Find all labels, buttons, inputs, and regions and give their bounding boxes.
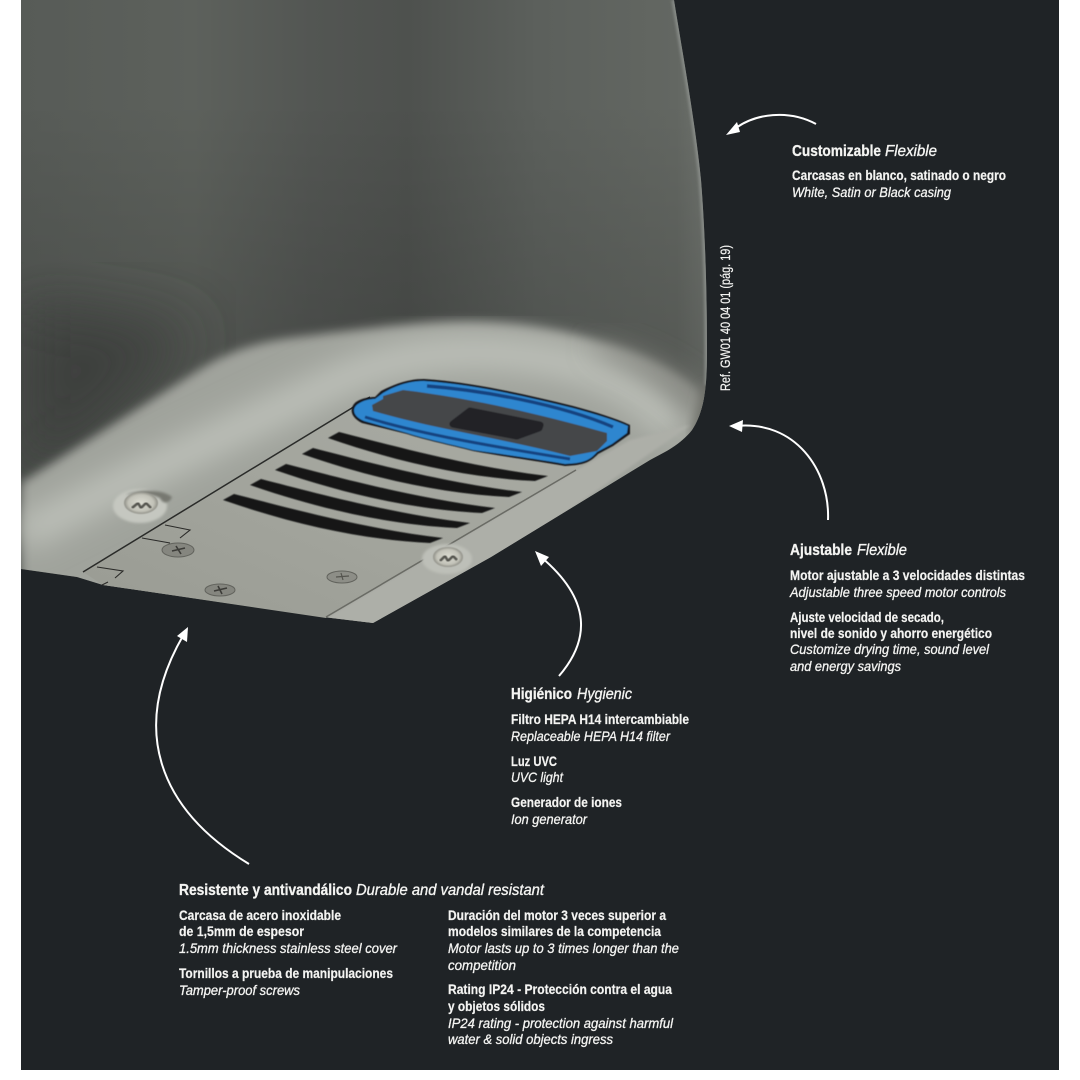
text block: ajustable [789, 542, 1025, 674]
text block: ajustable: Flexible [857, 542, 907, 559]
vertical reference text: Ref. GW01 40 04 01 (pág. 19) [717, 245, 733, 391]
arrow: resistente [156, 627, 249, 864]
text block: resistente: Duración del motor 3 veces superior a [448, 907, 666, 923]
text block: higienico: Hygienic [577, 686, 632, 703]
text block: resistente: modelos similares de la competencia [448, 923, 661, 939]
text block: ajustable: Adjustable three speed motor controls [789, 584, 1006, 600]
right lower strip [328, 438, 660, 623]
text block: higienico: Ion generator [511, 811, 588, 827]
text block: ajustable: Ajustable [790, 542, 852, 559]
text block: resistente: competition [448, 957, 516, 973]
arrow: customizable [726, 115, 816, 135]
text block: higienico: Generador de iones [511, 794, 622, 810]
text block: customizable: Customizable [792, 143, 881, 160]
sensor with blue light ring [352, 379, 630, 466]
shaded right corner [596, 346, 699, 420]
text block: higienico: Higiénico [511, 686, 572, 703]
text block: ajustable: Customize drying time, sound level [790, 641, 990, 657]
text block: resistente: de 1,5mm de espesor [179, 923, 304, 939]
text block: resistente: water & solid objects ingress [448, 1031, 613, 1047]
text block: resistente: y objetos sólidos [448, 998, 545, 1014]
ventilation slots [223, 432, 548, 543]
text block: resistente: Motor lasts up to 3 times longer than the [448, 940, 679, 956]
arrow: higienico [535, 551, 581, 676]
text block: higienico: UVC light [511, 769, 564, 785]
text block: resistente: Rating IP24 - Protección contra el agua [448, 981, 672, 997]
light lower rim of the casing [21, 322, 712, 640]
text block: customizable: Flexible [885, 143, 937, 160]
text block: resistente: Resistente y antivandálico [179, 882, 352, 899]
text block: resistente: Tornillos a prueba de manipulaciones [179, 965, 393, 981]
text block: resistente: Tamper-proof screws [179, 982, 300, 998]
text block: resistente: Carcasa de acero inoxidable [179, 907, 341, 923]
text block: customizable: White, Satin or Black casing [792, 184, 951, 200]
arrow: ajustable [729, 420, 828, 520]
text block: customizable: Carcasas en blanco, satinado o negro [792, 167, 1006, 183]
text block: ajustable: and energy savings [790, 658, 901, 674]
text block: resistente: 1.5mm thickness stainless steel cover [179, 940, 398, 956]
product photo: hand dryer underside [21, 0, 712, 640]
plate seams [83, 397, 370, 572]
right vertical highlight [674, 0, 707, 385]
text block: higienico [511, 686, 689, 827]
text block: resistente: IP24 rating - protection against harmful [448, 1015, 674, 1031]
rim highlight [21, 353, 675, 535]
text block: higienico: Filtro HEPA H14 intercambiable [511, 711, 689, 727]
text block: resistente [179, 882, 679, 1047]
text block: ajustable: Motor ajustable a 3 velocidades distintas [790, 567, 1025, 583]
screws [113, 489, 472, 596]
bottom plate [83, 393, 600, 618]
text block: higienico: Luz UVC [511, 753, 557, 769]
sensor window [453, 411, 540, 436]
text block: resistente: Durable and vandal resistant [356, 882, 545, 899]
text block: higienico: Replaceable HEPA H14 filter [511, 728, 671, 744]
text block: ajustable: Ajuste velocidad de secado, [790, 609, 944, 625]
text block: customizable [792, 143, 1006, 200]
text block: ajustable: nivel de sonido y ahorro energético [790, 625, 992, 641]
